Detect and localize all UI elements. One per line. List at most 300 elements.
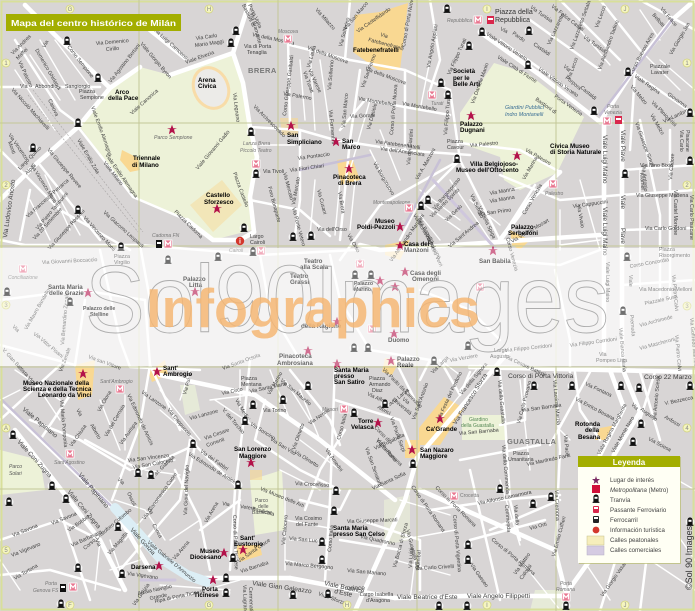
point of interest labels: San [287, 132, 299, 139]
street name labels: Via Ludovico Ariosto [2, 179, 17, 238]
street name labels: Via Lazzaretto [546, 13, 566, 46]
street name labels: Via San Calocero [132, 458, 174, 471]
street name labels: Via Agostino Bertani [108, 43, 142, 84]
street name labels: Via Festa del Perdono [436, 371, 464, 421]
point of interest labels: di Milano [132, 162, 159, 169]
street name labels: Via Giorgio Vasari [600, 560, 629, 598]
street name labels: V. Gian Battista Vico [1, 347, 37, 387]
street name labels: Via Vittorio Mozart [510, 218, 551, 245]
street name labels: Piazza Castello [231, 172, 249, 208]
legend entries: Información turística [610, 527, 665, 534]
street name labels: Via Sciesa [647, 436, 672, 453]
street name labels: Via [630, 402, 639, 412]
point of interest labels: San Babila [479, 258, 511, 265]
street name labels: Via Melzo [628, 84, 648, 106]
street name labels: Via Cesare Battisti [504, 354, 546, 378]
street name labels: Via [379, 32, 388, 40]
street name labels: Via Pantano [374, 437, 398, 463]
street name labels: Piave [619, 228, 626, 244]
street name labels: Armando [369, 382, 391, 388]
metro station names: Conciliazione [8, 275, 38, 281]
neighbourhood names: BRERA [248, 66, 277, 75]
metro station names: Giardini Pubblici [505, 105, 545, 111]
street name labels: Corso di Porta Romana [490, 537, 536, 577]
street name labels: Via San Vito [269, 437, 297, 457]
point of interest labels: Torre [358, 418, 374, 425]
street name labels: Via Castel Morrone [672, 190, 678, 235]
street name labels: Via Felice [658, 6, 678, 28]
street name labels: Via Museo delle Arti [259, 486, 305, 509]
point of interest labels: Palazzo delle [83, 306, 115, 312]
street name labels: Bastioni di [240, 3, 256, 28]
point of interest labels: Pinacoteca [333, 174, 366, 181]
legend panel [578, 456, 681, 564]
point of interest labels: Palazzo [460, 121, 483, 128]
metro station names: Porta [607, 104, 619, 110]
street name labels: Corso di Porta Ticinese [231, 515, 239, 570]
street name labels: Corso di Porta Romana [434, 485, 477, 529]
point of interest labels: San Satiro [334, 379, 365, 386]
street name labels: Via Olona [97, 390, 113, 413]
street name labels: Via Tivoli [263, 169, 284, 175]
point of interest labels: per le [453, 75, 470, 82]
neighbourhood names [248, 66, 556, 446]
point of interest labels: delle Grazie [49, 290, 84, 297]
point of interest labels: Triennale [133, 155, 161, 162]
point of interest labels: Civica Museo [550, 143, 590, 150]
street name labels: Kramer [638, 173, 646, 191]
street name labels: Via Palestro [470, 141, 499, 149]
street name labels: Risorgimento [659, 253, 690, 259]
street name labels: Bastioni di [534, 97, 557, 116]
point of interest labels: Ambrogio [163, 371, 192, 378]
street name labels: Via di Porta [244, 44, 271, 50]
legend entries [610, 477, 668, 554]
point of interest labels: Santa Maria [48, 284, 83, 291]
point of interest labels: Arena [198, 77, 216, 84]
street name labels: Via Carlo Pirovano [516, 380, 533, 425]
street name labels: d'Este [334, 588, 353, 599]
street name labels: Via Carlo Pisacane [688, 195, 694, 240]
street name labels: Via Ponte Vetero [290, 207, 306, 247]
street name labels: Commenda [503, 505, 511, 533]
larger street labels [495, 9, 533, 24]
street name labels: Via San Mariano [347, 568, 386, 577]
point of interest labels: Teatro [290, 273, 309, 280]
metro station names: Sant'Ambrogio [100, 379, 133, 385]
watermark: Sol 90 Images outline: Sol90Images [85, 246, 609, 353]
street name labels: Via Giovanni Boccaccio [42, 257, 98, 266]
street name labels: Porta Venezia [553, 94, 583, 118]
street name labels: Via Amedei [323, 448, 344, 473]
point of interest labels: Arco [115, 89, 129, 96]
street name labels: Corso Giuseppe Garibaldi [282, 55, 295, 116]
street name labels: Viale Sforza [317, 591, 346, 607]
white wash band under the labels [0, 248, 695, 366]
grid reference markers: 2 [685, 183, 689, 189]
street name labels: Piazzale Susa [644, 294, 678, 307]
street name labels: Vetere [240, 504, 256, 512]
street name labels: Via Alfonso Lamarmora [477, 490, 532, 507]
point of interest labels: Marco [342, 144, 360, 151]
street name labels: Via Savona [12, 523, 39, 539]
street name labels: Viale Beatrice d'Este [397, 594, 458, 601]
point of interest labels: Museo [200, 548, 220, 555]
street name labels: Via Cusani [315, 189, 327, 215]
street name labels: orince [347, 585, 365, 592]
street name labels: Abbondio [35, 84, 57, 90]
street name labels: Via Nino Bixio [640, 163, 673, 169]
street name labels: Corso Buenos Aires [628, 31, 656, 76]
stars: places of interest [78, 111, 522, 584]
street name labels: Via Aurispa [119, 421, 139, 446]
point of interest labels: Diocesano [190, 554, 222, 561]
grid reference markers: 3 [4, 303, 8, 309]
street name labels: Via Arena [204, 501, 220, 524]
street name labels: Piazza [659, 247, 675, 253]
point of interest labels: presso [334, 373, 355, 380]
point of interest labels: Maggiore [239, 453, 267, 460]
street name labels: Via Cesare [204, 427, 230, 442]
street name labels: Via [499, 26, 509, 35]
street name labels: Viale Emilio Alemagna [103, 153, 138, 199]
street name labels: Università [391, 397, 413, 417]
street name labels: Corso di Porta Romana [409, 485, 446, 534]
street name labels: Viale Canonica [129, 88, 160, 116]
street name labels: Via Enrico Besana [574, 396, 615, 422]
metro station names: della Guastalla [461, 423, 494, 429]
street name labels: Via Luigi Camoens [152, 27, 189, 61]
street name labels: Via Solferino [338, 17, 352, 48]
pedestrian and landmark areas [75, 3, 616, 562]
street name labels: Via Nerino [308, 408, 331, 427]
point of interest labels: Casa degli [410, 270, 441, 277]
grid reference markers: J [624, 603, 626, 609]
street name labels: Via Vigevano [127, 571, 158, 581]
street name labels: Via Tunisia [529, 5, 553, 24]
point of interest labels: Darsena [131, 564, 156, 571]
street name labels: Viale Gian Galeazzo [252, 580, 312, 595]
legend entries: Tranvía [610, 497, 631, 504]
street name labels: Via Cosimo [295, 516, 322, 522]
street name labels: Via Crocefisso [295, 481, 329, 489]
street name labels: Via Alessandro Tadino [597, 20, 621, 71]
street name labels: Viale Coni Zugna [16, 439, 53, 480]
legend entries: Ferrocarril [610, 517, 638, 524]
street name labels: Via Daniele Manin [470, 62, 491, 105]
point of interest labels: di Storia Naturale [550, 149, 602, 156]
street name labels: Porpora [564, 75, 582, 92]
grid reference markers: H [345, 603, 349, 609]
street name labels: Castaldi [532, 42, 551, 58]
street name labels: Via Circo [221, 387, 243, 397]
street name labels: Via Monte Napoleone [411, 213, 442, 260]
street name labels: V. Bezzecca [664, 395, 694, 407]
street name labels: Via Fatebenefratelli [375, 139, 421, 151]
street name labels: Via San Barnaba [459, 428, 499, 437]
street name labels: Piazza Cadorna [173, 209, 204, 240]
street name labels: Via Carlo Crivelli [415, 564, 454, 572]
street name labels: Foro Bonaparte [266, 186, 281, 223]
point of interest labels: Reale [397, 362, 414, 369]
street name labels: Via della Spiga [476, 205, 497, 240]
street name labels: Via Verziere [449, 353, 478, 364]
street name labels: Castaldi [579, 85, 597, 102]
street name labels: Via [93, 538, 102, 548]
street name labels: Porta Volta [246, 3, 263, 29]
point of interest labels: di Brera [338, 180, 362, 187]
street name labels: Piazza [241, 376, 257, 382]
street name labels: Viale Luigi Maino [604, 262, 610, 302]
street name labels: Via A. Manzoni [415, 147, 437, 181]
street name labels: Via Paolo da Cannobio [381, 367, 423, 410]
parks and green areas [0, 53, 584, 611]
street name labels: Via Macedonio Melloni [639, 287, 692, 293]
street name labels: Viale Emilio Zola [75, 138, 100, 175]
street name labels: Via Maria Pomponia [58, 400, 68, 448]
street name labels: Porta Romana [375, 439, 403, 468]
street name labels: Via Carlo Goldoni [645, 226, 686, 232]
street name labels: Via Legnano [231, 93, 241, 123]
street name labels: Mentana [241, 382, 262, 388]
point of interest labels: Museo dell'Ottocento [456, 167, 519, 174]
street name labels: Via Fiori Chiari [289, 163, 325, 174]
street name labels: Canova [46, 98, 59, 117]
street name labels: Via Lanzone [189, 409, 219, 422]
legend entries: Lugar de interés [610, 477, 654, 484]
street name labels: Via Domenico [96, 38, 129, 47]
street name labels: Via Manfredo Fanti [526, 453, 571, 468]
water: Darsena and naviglio [115, 508, 207, 582]
title: Mapa del centro histórico de Milán [11, 18, 176, 28]
street name labels: Via della Moscova [364, 66, 407, 87]
metro station names: Montenapoleone [373, 200, 410, 206]
street name labels: Via Pontaccio [297, 152, 330, 162]
point of interest labels: Palazzo [354, 281, 373, 287]
street name labels: Via Marina [489, 195, 515, 205]
street name labels: Via Torino [263, 408, 286, 414]
street name labels: Via Arena [172, 540, 191, 561]
metro station names: Turati [431, 101, 444, 107]
street name labels: Via [116, 477, 125, 486]
street name labels: Via Savona [51, 511, 78, 527]
street name labels: Largo Isabella [360, 592, 393, 598]
street name labels: Corso Italia [336, 413, 349, 441]
point of interest labels: Porta [202, 586, 218, 593]
street name labels: Via Orso [345, 233, 361, 254]
street name labels: Via Marina [522, 156, 539, 181]
street name labels: Viale Regina [633, 74, 661, 96]
street name labels: Viale Papiniano [21, 406, 59, 440]
street name labels: V. del Torchio [220, 407, 245, 435]
street name labels: Via Turati [301, 71, 314, 94]
street name labels: Via Solferino [327, 60, 336, 90]
point of interest labels: Sforzesco [204, 199, 234, 206]
street name labels: Via Tortona [13, 563, 39, 582]
street name labels: Sempione [80, 95, 104, 101]
grid reference markers: 3 [685, 304, 689, 310]
point of interest labels: Besana [578, 434, 601, 441]
street name labels: Via [222, 501, 230, 508]
street name labels: Viale Angelo Filippetti [467, 593, 530, 600]
street name labels: Viale Vittorio Veneto [537, 67, 579, 99]
street name labels: Via Giorgio Jan [669, 22, 692, 56]
street name labels: Viale Piave [619, 130, 626, 162]
point of interest labels: Serbelloni [508, 230, 538, 237]
grid reference markers: G [207, 603, 212, 609]
grid reference markers: G [68, 7, 73, 13]
street name labels: Viale Papiniano [76, 472, 110, 510]
street name labels: Via della [512, 505, 520, 525]
street name labels: Via Cappuccio [165, 407, 192, 437]
street name labels: Via Francesco Petrarca [25, 178, 70, 219]
street name labels: Via Guastalla Sita [404, 529, 421, 571]
street name labels: Basilicata [251, 506, 275, 518]
street name labels: Via [74, 408, 83, 418]
street name labels: Via San Marco [341, 93, 350, 128]
street name labels: Via Mascheroni [639, 337, 676, 352]
Arena Civica ring [187, 62, 235, 114]
street name labels: Viale Luigi Maino [601, 135, 608, 184]
street name labels: Piazzale [650, 64, 670, 70]
point of interest labels: Sant' [163, 365, 178, 372]
street name labels: Via dei Fabbri [199, 449, 229, 472]
street name labels: Via Santa Marta [249, 381, 288, 395]
street name labels: Corso di Porta Nuova [389, 84, 399, 135]
street name labels: Corso Venezia [504, 237, 519, 272]
street name labels: Via Santa Sofia [371, 471, 407, 492]
street name labels: Via San Barnaba [521, 402, 562, 414]
street name labels: Via Carlo [678, 130, 684, 152]
street name labels: Viale Luigi Maino [601, 207, 608, 256]
street name labels: Tenaglia [247, 50, 267, 56]
street name labels: Via San Maurilio [279, 378, 312, 407]
street name labels: Via Andrea [10, 34, 33, 56]
point of interest labels: Simpliciano [287, 139, 322, 146]
street name labels: Via Gesù [444, 204, 464, 223]
metro station names: Indro Montanelli [505, 112, 544, 118]
street name labels: Via Antonio [640, 165, 648, 192]
street name labels: Via Gorani [350, 113, 375, 120]
street name labels: Via Varese [306, 68, 322, 94]
grid reference markers: H [207, 7, 211, 13]
street name labels: Annibal [416, 550, 423, 568]
point of interest labels: Scienza e della Tecnica [23, 386, 92, 393]
title [6, 14, 181, 31]
street name labels: Via [599, 352, 607, 358]
street name labels: Via Santa Orsola [222, 353, 261, 372]
street name labels: Via Santo Spirito [429, 187, 461, 219]
street name labels: Via Olmetto [293, 450, 320, 469]
street name labels: Via Bernardino Zenale [60, 292, 71, 345]
street name labels: Crist. Gianola [149, 454, 176, 481]
street name labels: Via della Guastalla [496, 380, 506, 424]
street name labels: Viale Gorizia [129, 527, 156, 557]
point of interest labels: Velasca [351, 424, 374, 431]
street name labels: Pompeo Litta [596, 358, 627, 364]
icon: tourist information: i [239, 239, 241, 246]
point of interest labels: Grassi [290, 279, 310, 286]
street name labels: Via [562, 64, 571, 73]
larger street labels: Repubblica [495, 17, 530, 24]
street name labels: Via Formentini [327, 110, 336, 144]
street name labels: Via San Primo [477, 207, 512, 218]
street name labels: Via Larga [389, 387, 411, 407]
street name labels: Via 20 Settembre [32, 207, 64, 241]
street name labels: Alberto [88, 423, 102, 441]
street name labels: Via Lanzone [140, 390, 167, 412]
grid reference markers: A [4, 426, 8, 432]
street name labels: Via Senato [468, 193, 485, 219]
street name labels: Largo [250, 234, 264, 240]
street name labels: Via Francesco Sforza [452, 372, 489, 426]
point of interest labels: Villa Belgiojoso- [470, 161, 518, 168]
point of interest labels: Santa Maria [334, 367, 369, 374]
street name labels: Via Gaeseo [468, 563, 489, 589]
street name labels: Via Giuseppe Revere [45, 147, 82, 190]
point of interest labels: San Nazaro [420, 447, 454, 454]
street name labels: Virgilio [114, 260, 130, 266]
copyright: ©Sol 90 Images [684, 525, 694, 590]
point of interest labels: Santa Maria [333, 525, 368, 532]
street name labels: Via [401, 397, 411, 406]
street name labels: Via Angelo Appiani [426, 24, 440, 68]
point of interest labels: presso San Celso [333, 531, 385, 538]
street name labels: Via Plinio Frisi [650, 100, 677, 128]
metro station names: Crocetta [460, 493, 479, 499]
street name labels: Lavater [651, 70, 669, 76]
point of interest labels: Museo Nazionale della [23, 380, 90, 387]
street name labels: Via Pace [562, 435, 570, 456]
street name labels: Corso Italia [327, 525, 335, 552]
street name labels: Via Tunisia [582, 35, 606, 54]
street name labels: Via Orti [529, 522, 547, 532]
grid reference markers: I [486, 7, 488, 13]
street name labels: Via Pietro Tamburini [35, 191, 70, 231]
street name labels: Giovanna [666, 92, 688, 110]
street name labels: Via Calocero [281, 514, 290, 545]
street name labels: d'Aragona [366, 598, 390, 604]
street name labels: Via Lecco [594, 5, 608, 29]
street name labels: Cirillo [106, 46, 119, 53]
street name labels: del Fante [296, 522, 318, 528]
street name labels: Via Palestro [524, 148, 552, 167]
street name labels: Fatebenefratelli [367, 37, 404, 52]
legend heading: Leyenda [613, 458, 646, 467]
street name labels: Viale Regina Margherita [596, 403, 628, 456]
point of interest labels: della Pace [108, 95, 139, 102]
point of interest labels: Maggiore [420, 453, 448, 460]
street name labels: Via Sant'Antonio [411, 382, 430, 421]
metro station names: Piccolo Teatro [240, 148, 272, 154]
street name labels: Corso di Porta Vigentina [451, 515, 462, 572]
street name labels: Augusto [490, 354, 509, 360]
passante and railway icons [60, 16, 622, 592]
street name labels: Via Soncino [249, 422, 276, 442]
street name labels: Via della Moscova [252, 32, 295, 47]
street name labels: Umanitaria [508, 457, 534, 463]
street name labels: Via Cappuccini [572, 199, 608, 210]
street name labels: Via Montebello [402, 101, 437, 113]
street name labels: Piazza [447, 139, 463, 145]
point of interest labels: Palazzo [397, 356, 420, 363]
street name labels: Via Lazzaretto Settala [569, 0, 593, 51]
street name labels: Via Pietro Verri [423, 233, 444, 268]
street name labels: Corso 22 Marzo [644, 374, 692, 381]
metro station names: Porta [45, 581, 57, 587]
street name labels: Via [11, 324, 20, 334]
street name labels: Via Antonio Sciesa [652, 376, 662, 420]
